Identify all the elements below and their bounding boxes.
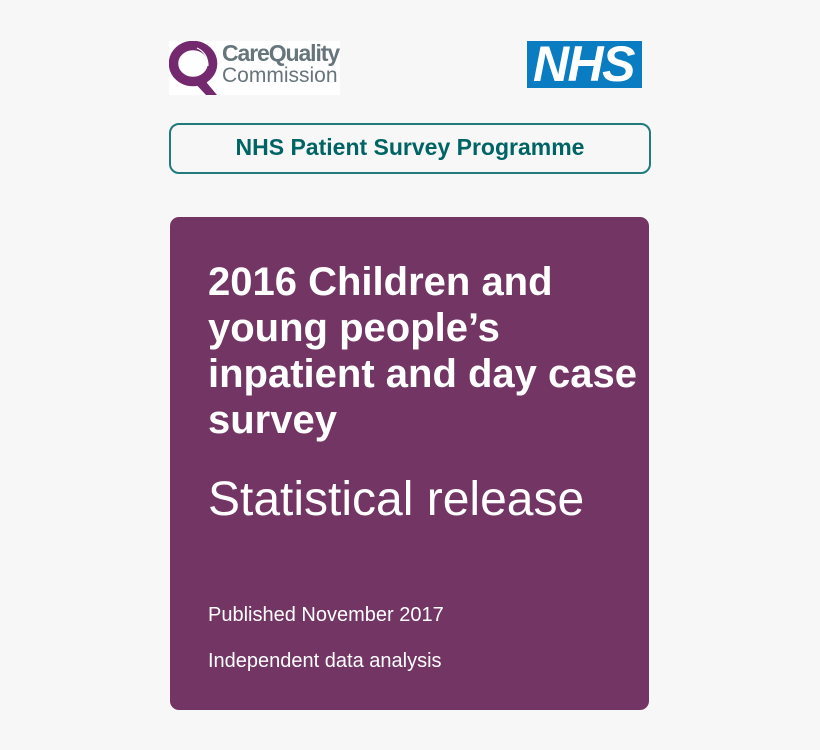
- title: 2016 Children and young people's inpatient and day case survey: 2016 Children and: [208, 260, 553, 304]
- heading: NHS Patient Survey Programme: NHS Patient Survey Programme: [236, 134, 584, 160]
- panel: programme banner: [169, 123, 651, 174]
- logo wordmark: Care Quality: CareQuality: [222, 40, 339, 66]
- title: 2016 Children and young people's inpatient and day case survey: young people’s: [208, 306, 500, 350]
- title: 2016 Children and young people's inpatient and day case survey: survey: [208, 398, 337, 442]
- title: 2016 Children and young people's inpatient and day case survey: inpatient and day case: [208, 352, 637, 396]
- text: publication date: Published November 2017: [208, 604, 444, 626]
- panel: purple title block: [170, 217, 649, 710]
- subtitle: Statistical release: Statistical release: [208, 473, 584, 526]
- icon: Q mark: [169, 41, 218, 95]
- text: data analysis note: Independent data analysis: [208, 650, 442, 672]
- logo: Care Quality Commission: [169, 41, 340, 95]
- title: 2016 Children and young people's inpatient and day case survey: [208, 260, 637, 442]
- logo wordmark: Commission: Commission: [222, 64, 338, 87]
- logo: NHS: [527, 41, 642, 88]
